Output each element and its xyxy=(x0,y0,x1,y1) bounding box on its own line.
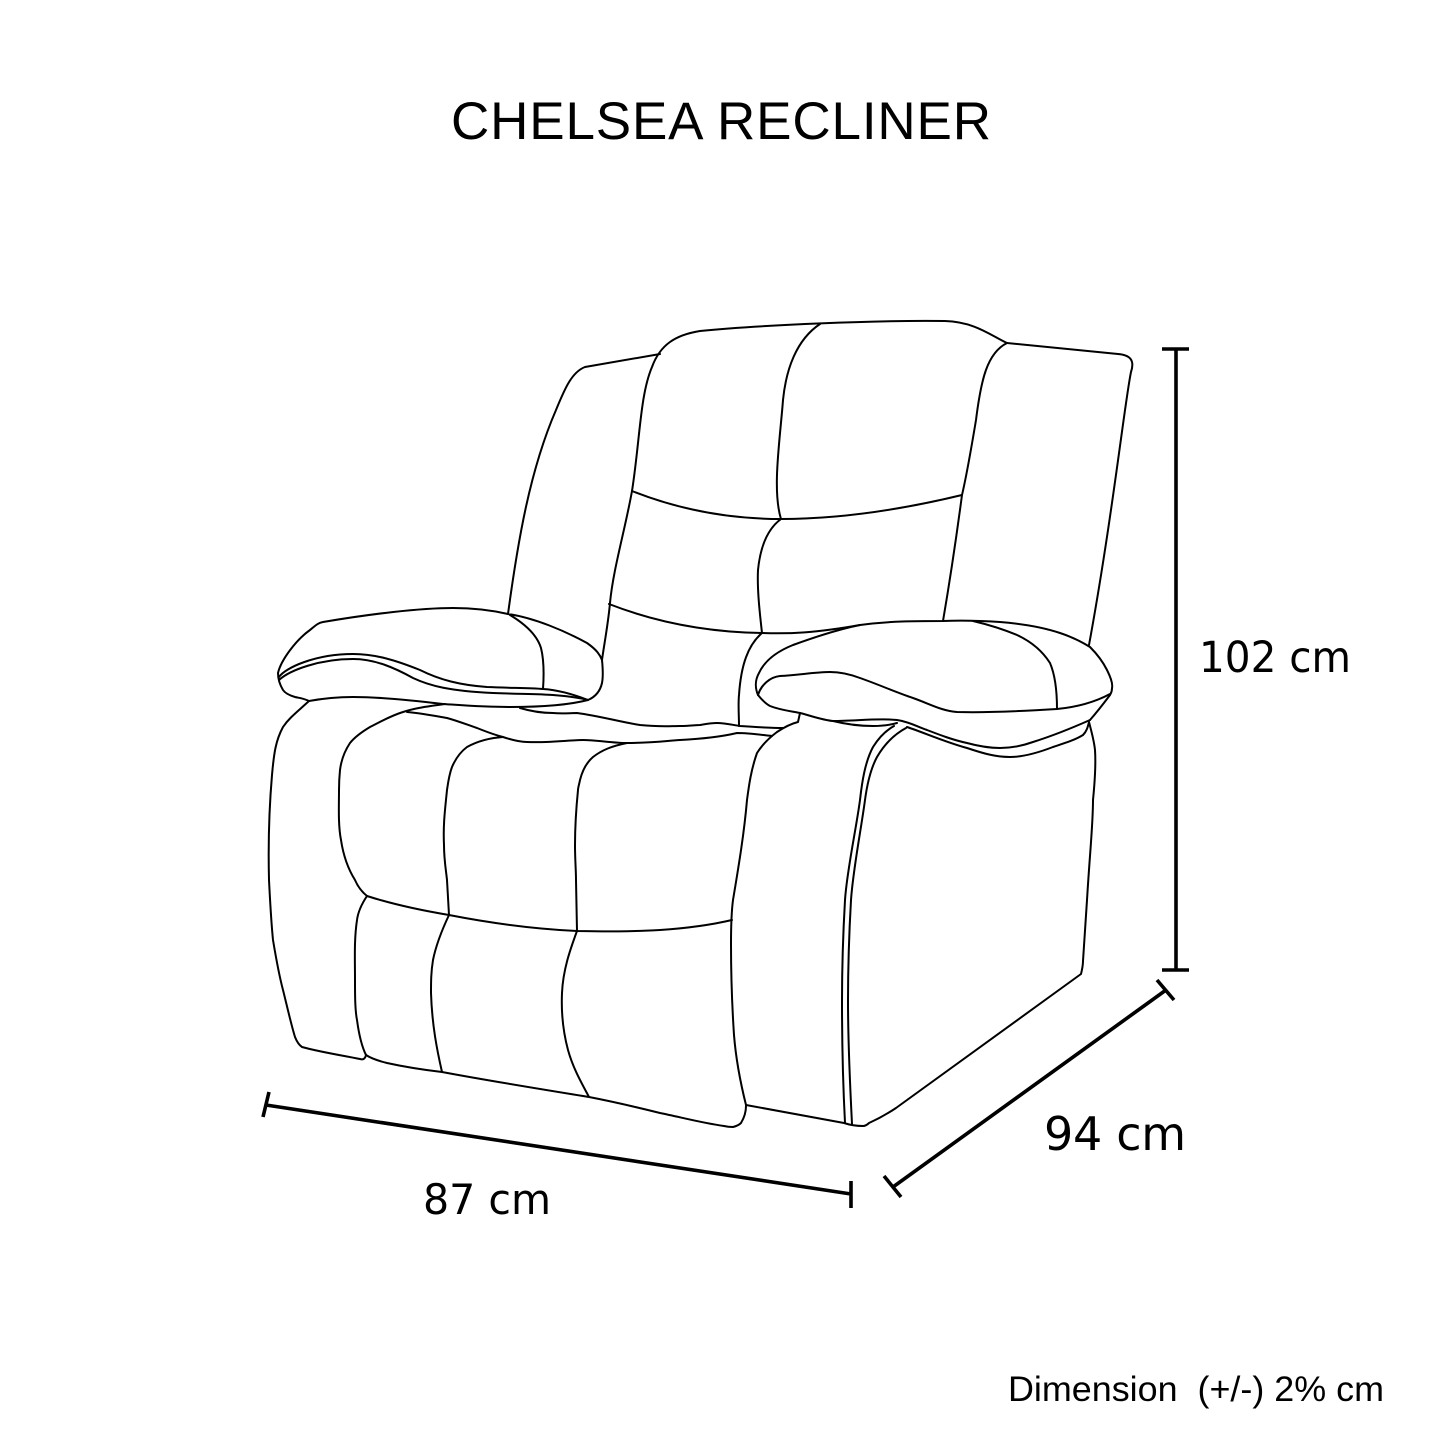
right arm front and side panel xyxy=(731,713,1095,1126)
dimension: height xyxy=(1162,349,1351,970)
backrest xyxy=(508,321,1132,726)
footnote: Dimension (+/-) 2% cm xyxy=(1008,1370,1384,1409)
seat cushions xyxy=(339,704,783,1127)
label: 102 cm: 102 cm xyxy=(1199,633,1351,683)
left armrest xyxy=(278,608,603,707)
title: CHELSEA RECLINER xyxy=(451,92,991,151)
left arm front xyxy=(269,701,366,1059)
dimension: width xyxy=(263,1092,851,1224)
recliner line drawing xyxy=(269,321,1132,1127)
dimension: depth xyxy=(884,980,1186,1197)
label: 87 cm: 87 cm xyxy=(423,1175,551,1224)
right armrest xyxy=(756,621,1112,757)
label: 94 cm: 94 cm xyxy=(1044,1107,1186,1161)
